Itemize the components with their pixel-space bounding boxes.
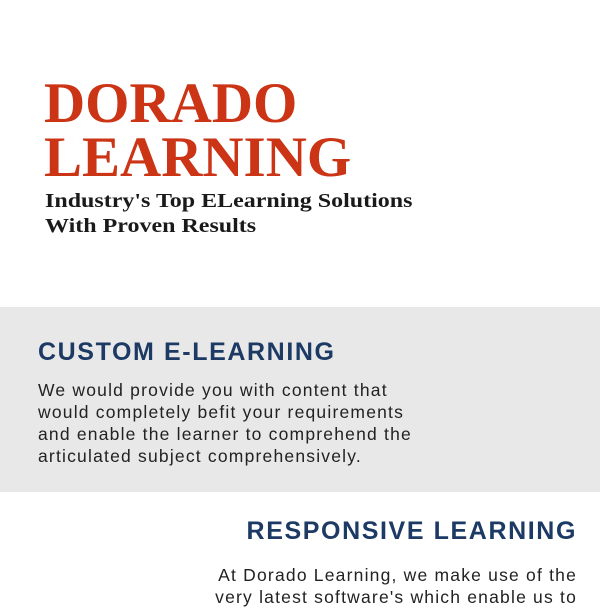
subtitle: With Proven Results xyxy=(45,215,256,237)
text: custom e-learning: articulated subject comprehensively. xyxy=(38,446,362,466)
title xyxy=(44,72,351,189)
title: LEARNING xyxy=(44,126,351,189)
text: custom e-learning: and enable the learner to comprehend the xyxy=(38,424,412,444)
text: responsive learning: At Dorado Learning, we make use of the xyxy=(218,565,577,585)
title: DORADO xyxy=(44,72,297,135)
text: custom e-learning: We would provide you with content that xyxy=(38,380,388,400)
text: custom e-learning xyxy=(38,380,412,466)
heading: custom e-learning: CUSTOM E-LEARNING xyxy=(38,338,336,366)
subtitle: Industry's Top ELearning Solutions xyxy=(45,190,412,212)
heading: responsive learning: RESPONSIVE LEARNING xyxy=(247,517,577,545)
subtitle xyxy=(45,190,412,237)
panel: responsive learning xyxy=(215,517,577,607)
panel: custom e-learning xyxy=(0,307,600,492)
text: responsive learning xyxy=(215,565,577,607)
text: responsive learning: very latest software's which enable us to xyxy=(215,587,577,607)
text: custom e-learning: would completely befit your requirements xyxy=(38,402,404,422)
